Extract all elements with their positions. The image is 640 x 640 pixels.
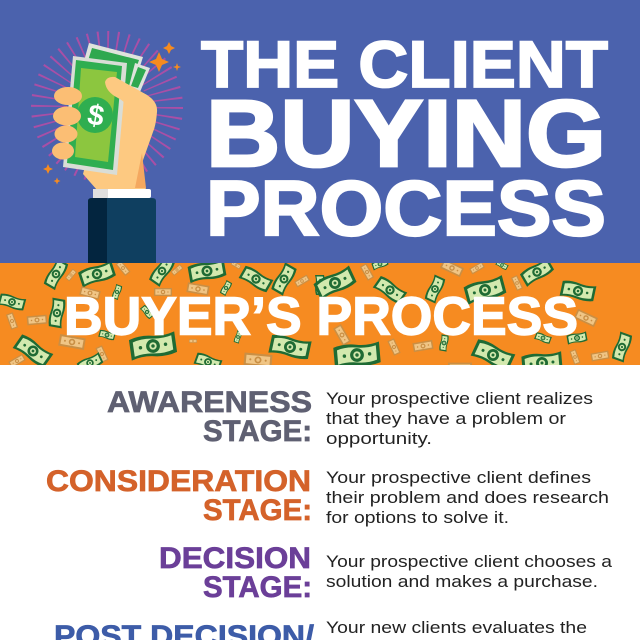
stage: post decision: [54, 619, 587, 640]
decision description: Your prospective client chooses a: [326, 553, 613, 571]
icon: back bills: [76, 43, 150, 104]
decision heading: STAGE:: [203, 571, 312, 604]
awareness heading: STAGE:: [203, 415, 312, 448]
awareness heading: [107, 386, 312, 448]
icon: orange sparkles: [43, 42, 181, 184]
icon: fingers: [52, 87, 82, 160]
icon: wrist shadow: [135, 153, 146, 188]
title line 1: THE CLIENT: [201, 27, 608, 101]
icon: pink sun rays: [49, 49, 165, 165]
stage: decision: [159, 542, 613, 604]
consideration description: [326, 469, 609, 527]
consideration description: Your prospective client defines: [326, 469, 591, 487]
title line 2: BUYING: [206, 81, 606, 187]
stage: consideration: [46, 465, 609, 527]
title line 3: PROCESS: [206, 164, 606, 252]
consideration heading: [46, 465, 312, 527]
awareness description: Your prospective client realizes: [326, 390, 593, 408]
header panel: [0, 0, 640, 263]
consideration heading: CONSIDERATION: [46, 465, 311, 498]
stage: awareness: [107, 386, 593, 448]
consideration heading: STAGE:: [203, 494, 312, 527]
decision description: [326, 553, 613, 591]
icon: jacket sleeve: [88, 198, 156, 263]
icon: palm and wrist: [83, 77, 157, 190]
money pattern: [0, 263, 632, 365]
dollar sign: $: [85, 99, 107, 133]
panel: orange money band: [0, 263, 640, 365]
awareness description: [326, 390, 593, 448]
heading: buyer's process: BUYER’S PROCESS: [64, 286, 578, 346]
icon: front bill with dollar sign: [63, 56, 127, 175]
decision description: solution and makes a purchase.: [326, 573, 598, 591]
decision heading: [159, 542, 312, 604]
icon: thumb: [105, 77, 153, 118]
post decision description: Your new clients evaluates the: [326, 619, 587, 637]
consideration description: for options to solve it.: [326, 509, 509, 527]
illustration: hand holding money: [43, 42, 181, 263]
awareness description: that they have a problem or: [326, 410, 567, 428]
icon: shirt cuff: [93, 189, 151, 198]
title: [201, 27, 608, 252]
awareness description: opportunity.: [326, 430, 432, 448]
awareness heading: AWARENESS: [107, 386, 312, 419]
decision heading: DECISION: [159, 542, 311, 575]
consideration description: their problem and does research: [326, 489, 609, 507]
